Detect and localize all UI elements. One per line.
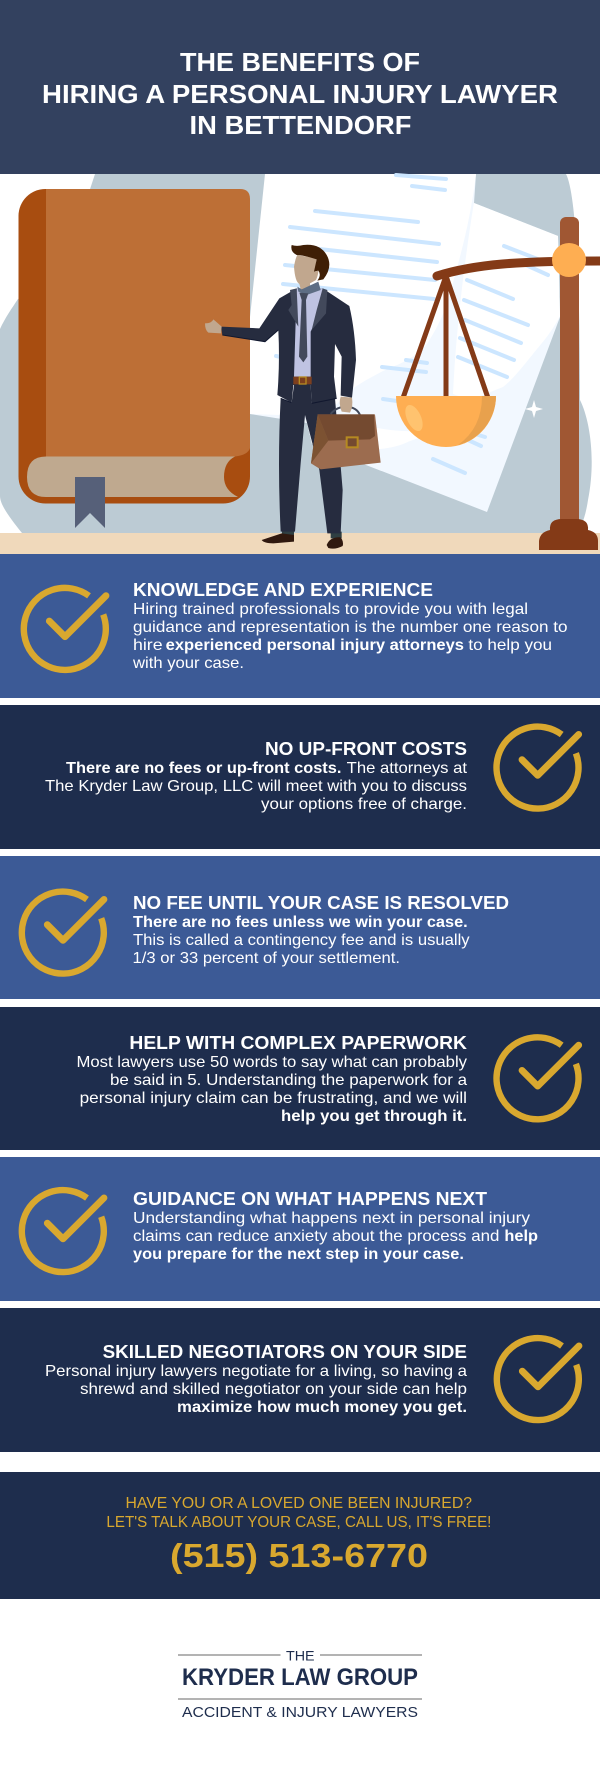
bookmark (75, 477, 105, 528)
documents (250, 174, 560, 512)
body text: shrewd and skilled negotiator on your side can help (80, 1381, 467, 1398)
sparkle (525, 400, 543, 418)
body text (132, 914, 470, 967)
body text (133, 1210, 538, 1263)
title (42, 47, 558, 140)
base (539, 519, 598, 550)
lapels (288, 288, 327, 330)
jacket (221, 288, 356, 403)
body text: The attorneys at (347, 760, 468, 777)
panel: help with complex paperwork (0, 1007, 600, 1150)
left hand (205, 319, 222, 333)
body text: guidance and representation is the number one reason to (133, 619, 568, 636)
title: THE BENEFITS OF (180, 47, 420, 77)
body text: experienced personal injury attorneys (166, 637, 464, 654)
heading: GUIDANCE ON WHAT HAPPENS NEXT (133, 1188, 488, 1209)
body text: to help you (468, 637, 552, 654)
logo: the kryder law group: THE (286, 1648, 315, 1664)
icon: check circle (497, 1338, 579, 1420)
beam (437, 261, 600, 276)
body text: be said in 5. Understanding the paperwork for a (110, 1072, 467, 1089)
body text: The Kryder Law Group, LLC will meet with you to discuss (45, 778, 467, 795)
body text (45, 760, 468, 813)
body text (45, 1363, 467, 1416)
body text: help (504, 1228, 538, 1245)
call to action text: LET'S TALK ABOUT YOUR CASE, CALL US, IT'S FREE! (106, 1514, 491, 1531)
ground (0, 533, 600, 554)
panel: guidance on what happens next (0, 1157, 600, 1301)
body text: Personal injury lawyers negotiate for a living, so having a (45, 1363, 467, 1380)
icon: check circle (22, 1190, 104, 1272)
heading: NO FEE UNTIL YOUR CASE IS RESOLVED (133, 892, 509, 913)
briefcase (311, 414, 381, 469)
knob (552, 243, 586, 277)
post (560, 217, 579, 527)
panel: call to action (0, 1472, 600, 1599)
logo: the kryder law group: ACCIDENT & INJURY LAWYERS (182, 1705, 418, 1721)
socks (282, 530, 342, 538)
panel: no up-front costs (0, 705, 600, 849)
law book (18, 189, 250, 528)
body text: This is called a contingency fee and is usually (133, 932, 470, 949)
body text: Hiring trained professionals to provide you with legal (133, 601, 528, 618)
body text (132, 601, 568, 672)
neck and face (294, 255, 318, 293)
call to action text: HAVE YOU OR A LOVED ONE BEEN INJURED? (126, 1495, 472, 1512)
body text: help you get through it. (281, 1108, 467, 1125)
logo: the kryder law group: KRYDER LAW GROUP (182, 1664, 418, 1691)
bowl (396, 396, 496, 447)
icon: check circle (24, 588, 106, 670)
belt (293, 377, 312, 384)
body text: your options free of charge. (261, 796, 467, 813)
header panel (0, 0, 600, 174)
jacket outline (222, 330, 337, 403)
body text (76, 1054, 467, 1125)
body text: personal injury claim can be frustrating, and we will (80, 1090, 467, 1107)
logo: the kryder law group (178, 1648, 422, 1721)
hair (291, 245, 329, 281)
panel: no fee until your case is resolved (0, 856, 600, 999)
body text: maximize how much money you get. (177, 1399, 467, 1416)
body text: Understanding what happens next in personal injury (133, 1210, 530, 1227)
handle (331, 407, 360, 415)
icon: check circle (497, 1037, 579, 1119)
businessman (205, 245, 381, 549)
heading: NO UP-FRONT COSTS (265, 738, 467, 759)
body text: 1/3 or 33 percent of your settlement. (132, 950, 400, 967)
title: IN BETTENDORF (190, 110, 412, 140)
body text: claims can reduce anxiety about the process and (133, 1228, 499, 1245)
tie (299, 293, 308, 362)
background blob (0, 174, 592, 533)
panel: knowledge and experience (0, 554, 600, 698)
body text: you prepare for the next step in your case. (133, 1246, 464, 1263)
heading: KNOWLEDGE AND EXPERIENCE (133, 579, 433, 600)
icon: check circle (22, 892, 104, 974)
shirt (294, 288, 323, 377)
title: HIRING A PERSONAL INJURY LAWYER (42, 79, 558, 109)
phone number: (515) 513-6770 (170, 1537, 428, 1574)
right hand (340, 397, 352, 413)
ropes (403, 276, 488, 398)
scales of justice (396, 217, 600, 550)
illustration: lawyer with law book and scales (0, 174, 600, 554)
heading: HELP WITH COMPLEX PAPERWORK (129, 1032, 468, 1053)
trousers (279, 385, 343, 533)
body text: hire (133, 637, 163, 654)
shoes (262, 533, 343, 549)
body text: Most lawyers use 50 words to say what can probably (76, 1054, 467, 1071)
heading: SKILLED NEGOTIATORS ON YOUR SIDE (103, 1341, 467, 1362)
panel: skilled negotiators on your side (0, 1308, 600, 1452)
body text: There are no fees unless we win your case. (133, 914, 468, 931)
call to action text (106, 1495, 491, 1531)
collar (297, 282, 321, 295)
icon: check circle (497, 727, 579, 809)
body text: with your case. (132, 655, 244, 672)
body text: There are no fees or up-front costs. (66, 760, 341, 777)
